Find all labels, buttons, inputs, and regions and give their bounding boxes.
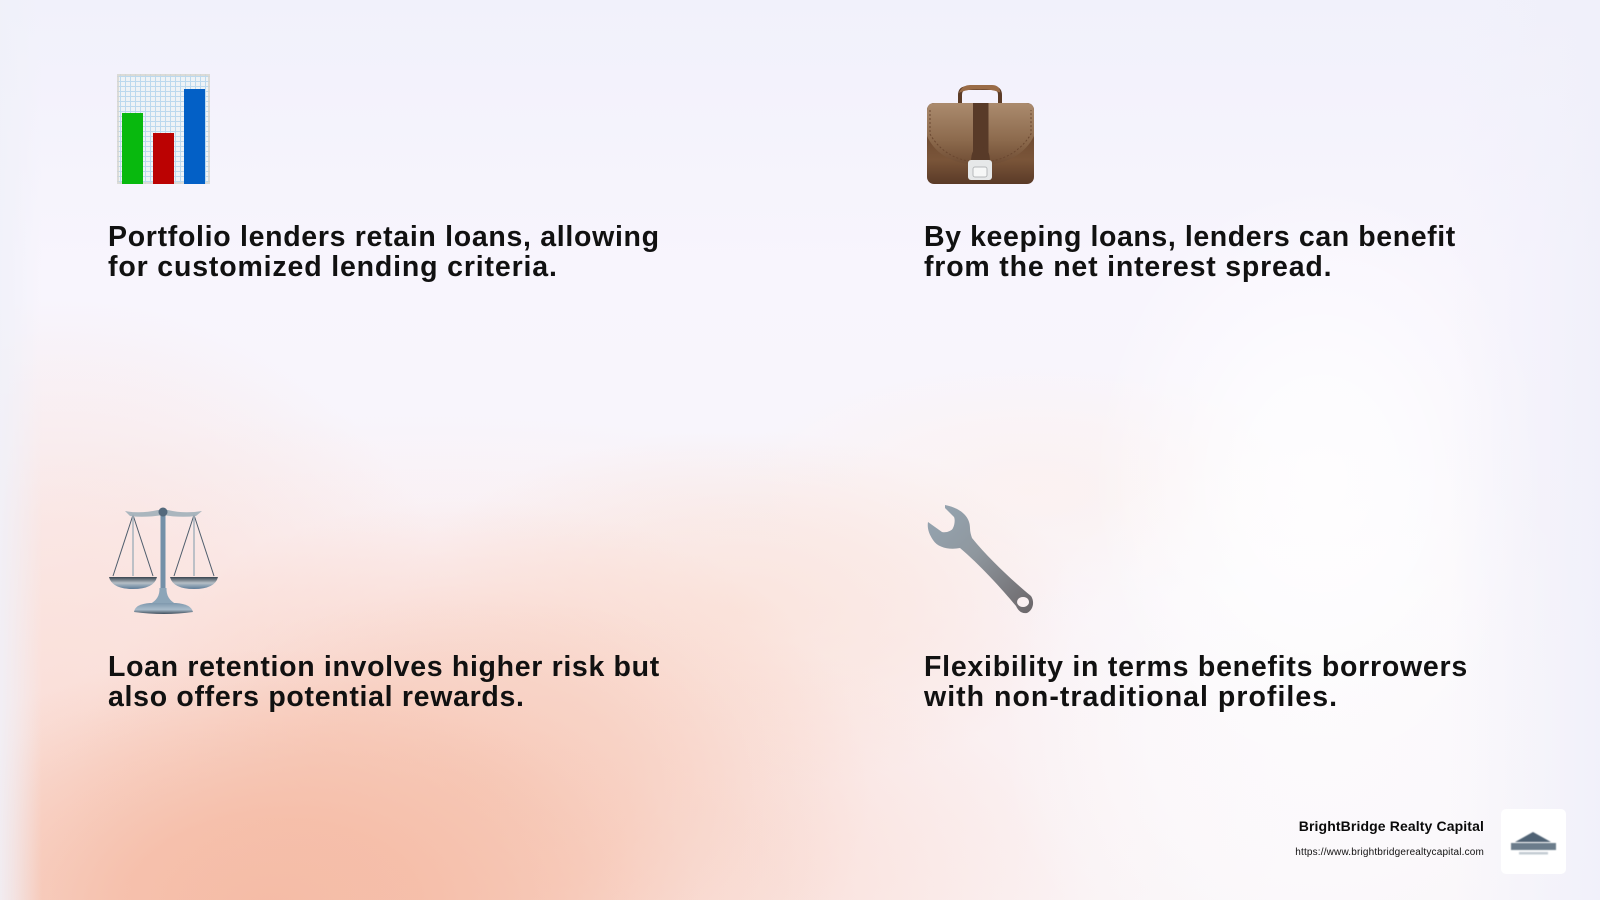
brand name: BrightBridge Realty Capital: [1299, 818, 1484, 834]
text: net interest spread: from the net interest spread.: [924, 251, 1332, 283]
text: flexibility: with non-traditional profiles.: [924, 681, 1338, 713]
text: risk and rewards: also offers potential rewards.: [108, 681, 525, 713]
panel: net interest spread: [924, 85, 1456, 283]
icon: wrench: [928, 505, 1034, 614]
text: portfolio lenders: for customized lending criteria.: [108, 251, 558, 283]
icon: logo building: [1510, 832, 1557, 855]
text: net interest spread: [924, 221, 1456, 283]
text: flexibility: [924, 651, 1468, 713]
panel: flexibility in terms: [924, 505, 1468, 713]
icon: bar chart: [117, 74, 210, 184]
panel: risk and rewards: [108, 508, 660, 713]
text: risk and rewards: [108, 651, 660, 713]
panel: portfolio lenders retain loans: [108, 74, 660, 283]
text: net interest spread: By keeping loans, lenders can benefit: [924, 221, 1456, 253]
text: portfolio lenders: [108, 221, 660, 283]
icon: balance scales: [109, 508, 218, 614]
icon: briefcase: [927, 85, 1034, 184]
text: flexibility: Flexibility in terms benefits borrowers: [924, 651, 1468, 683]
website url: https://www.brightbridgerealtycapital.com: [1295, 846, 1484, 858]
text: portfolio lenders: Portfolio lenders retain loans, allowing: [108, 221, 660, 253]
text: risk and rewards: Loan retention involves higher risk but: [108, 651, 660, 683]
logo tile: [1501, 809, 1566, 874]
